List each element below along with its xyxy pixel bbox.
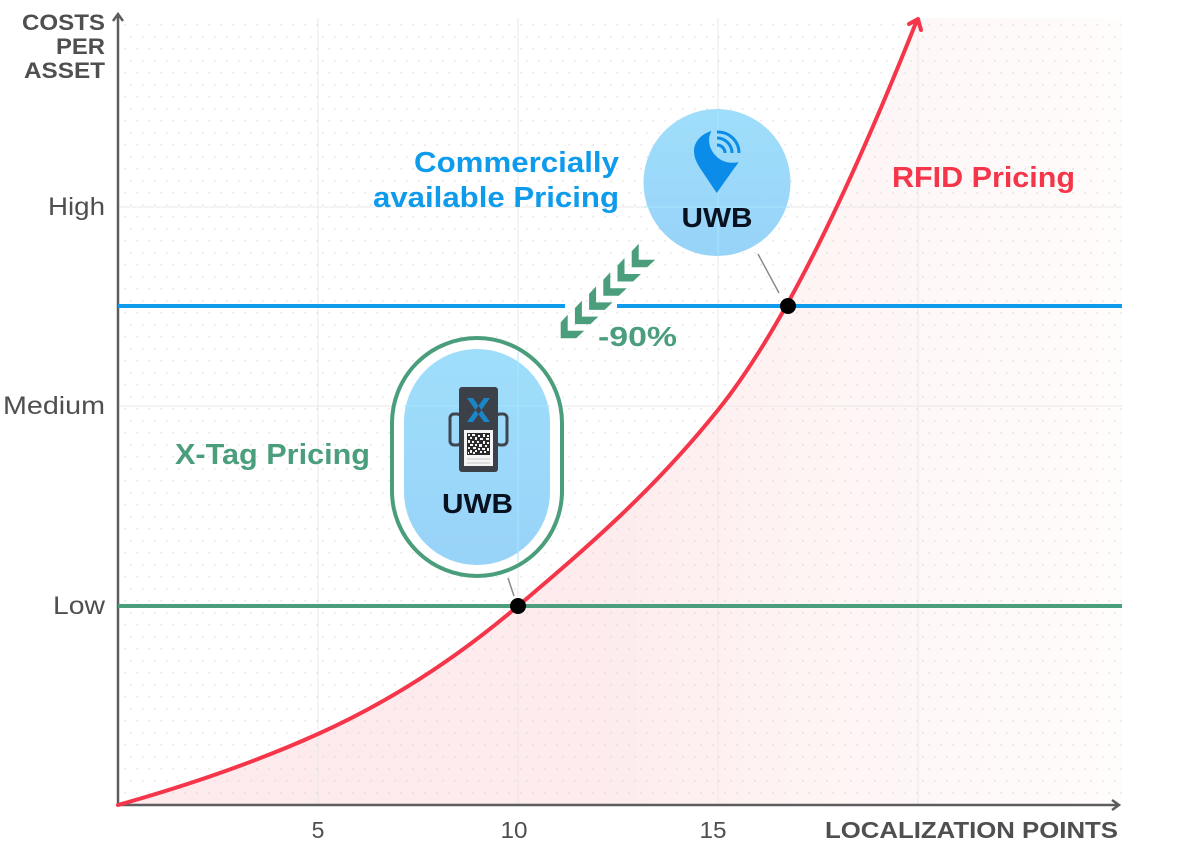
x axis tick labels: 10 <box>500 817 528 843</box>
UWB bubble: commercial <box>644 109 790 256</box>
marker: X-Tag intersection <box>510 598 526 614</box>
x axis <box>117 800 1119 810</box>
UWB text: UWB <box>442 488 513 519</box>
y axis title: PER <box>56 34 105 59</box>
grid lines <box>118 18 1122 805</box>
y axis title: COSTS <box>22 10 105 35</box>
x axis title: LOCALIZATION POINTS <box>825 817 1118 843</box>
RFID label: RFID Pricing <box>892 162 1075 194</box>
arrows: -90 percent chevrons <box>561 244 655 338</box>
dotted plot background <box>122 22 1122 804</box>
X-Tag pricing label: X-Tag Pricing <box>175 439 370 471</box>
RFID curve <box>118 19 921 805</box>
commercially available pricing label: available Pricing <box>373 182 619 214</box>
UWB text: UWB <box>682 202 752 233</box>
X-Tag pricing line <box>118 604 1122 608</box>
y axis tick labels: Low <box>53 592 106 620</box>
leader line: commercial bubble <box>758 254 779 293</box>
x axis tick labels: 5 <box>312 817 324 843</box>
icon: X-Tag device <box>450 387 507 472</box>
commercially available pricing label <box>373 147 619 214</box>
commercially available pricing label: Commercially <box>414 147 619 179</box>
-90 percent label: -90% <box>598 321 677 352</box>
y axis title: ASSET <box>24 58 106 83</box>
y axis <box>113 14 123 806</box>
commercial pricing line <box>118 304 1122 308</box>
y axis title <box>22 10 106 83</box>
y axis tick labels: High <box>48 193 105 221</box>
UWB capsule: X-Tag <box>392 338 562 576</box>
y axis tick labels <box>3 193 106 620</box>
x axis tick labels <box>312 817 726 843</box>
icon: location pin with signal waves <box>694 131 739 193</box>
x axis tick labels: 15 <box>700 817 726 843</box>
leader line: X-Tag bubble <box>508 578 514 596</box>
marker: commercial intersection <box>780 298 796 314</box>
area under RFID curve <box>118 18 1122 805</box>
y axis tick labels: Medium <box>3 392 105 420</box>
